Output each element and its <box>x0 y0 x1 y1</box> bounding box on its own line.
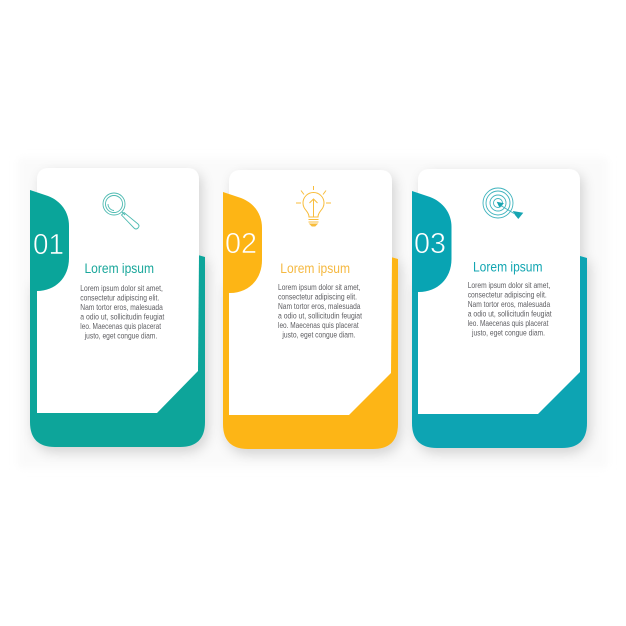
card 02 body text: leo. Maecenas quis placerat <box>278 320 359 330</box>
card 01 body text: justo, eget congue diam. <box>84 330 157 340</box>
card 02 heading: Lorem ipsum <box>280 261 350 276</box>
card 01 body text: consectetur adipiscing elit. <box>80 292 159 302</box>
card 03 number: 03 <box>414 228 446 260</box>
card 01 sheet and coloured base <box>30 168 205 447</box>
panel: card 03 <box>412 169 587 448</box>
card 01 body text: leo. Maecenas quis placerat <box>80 321 161 331</box>
card 03 body text: consectetur adipiscing elit. <box>468 290 547 300</box>
card 01 body text: a odio ut, sollicitudin feugiat <box>80 312 165 322</box>
card 02 body text: justo, eget congue diam. <box>282 330 355 340</box>
card 03 heading: Lorem ipsum <box>473 260 542 274</box>
card 03 body text: Lorem ipsum dolor sit amet, <box>468 280 550 290</box>
card 01 number tab <box>30 190 69 291</box>
card 02 body text <box>278 282 362 340</box>
icon: target with arrow <box>483 188 523 219</box>
card 03 number tab <box>412 191 452 292</box>
card 03 body text: Nam tortor eros, malesuada <box>468 299 550 309</box>
card 03 body text: a odio ut, sollicitudin feugiat <box>468 308 552 318</box>
card 02 number: 02 <box>225 228 257 260</box>
card 01 body text <box>80 283 165 340</box>
card 02 body text: Lorem ipsum dolor sit amet, <box>278 282 360 292</box>
card 02 body text: Nam tortor eros, malesuada <box>278 301 361 311</box>
card 01 body text: Lorem ipsum dolor sit amet, <box>80 283 163 293</box>
card 01 number: 01 <box>33 229 64 261</box>
card 02 body text: a odio ut, sollicitudin feugiat <box>278 310 362 320</box>
card 03 body text: leo. Maecenas quis placerat <box>468 318 549 328</box>
card 01 heading: Lorem ipsum <box>84 261 154 276</box>
card 03 sheet and coloured base <box>412 169 587 448</box>
panel: card 02 <box>223 170 398 449</box>
card 02 sheet and coloured base <box>223 170 398 449</box>
card 02 body text: consectetur adipiscing elit. <box>278 292 357 302</box>
card 01 body text: Nam tortor eros, malesuada <box>80 302 163 312</box>
icon: magnifying glass <box>103 193 139 229</box>
card 02 number tab <box>223 192 262 293</box>
card 03 body text <box>468 280 552 338</box>
icon: light bulb <box>296 186 331 226</box>
panel: card 01 <box>30 168 205 447</box>
card 03 body text: justo, eget congue diam. <box>471 328 545 338</box>
